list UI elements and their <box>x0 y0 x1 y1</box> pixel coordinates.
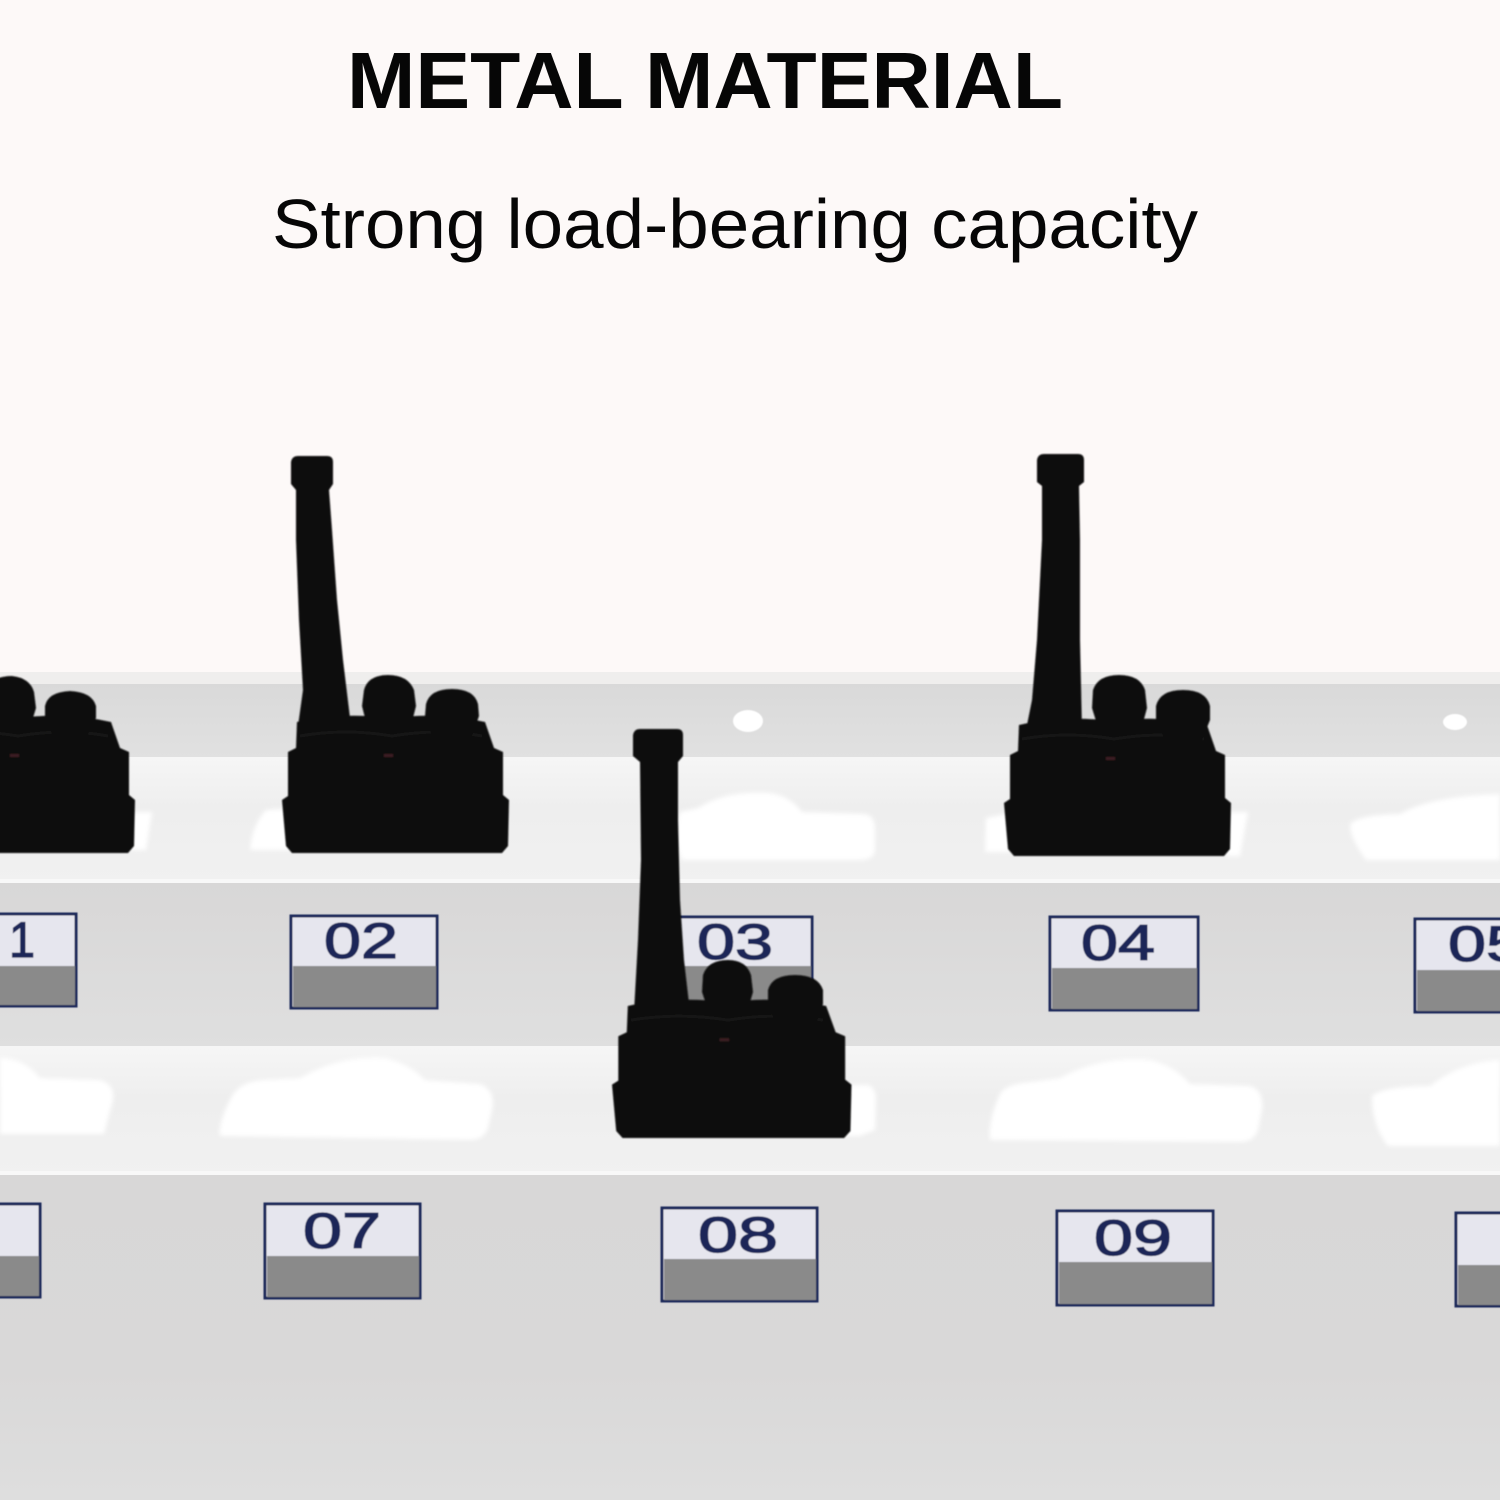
number label 06 <box>0 1204 40 1297</box>
page background <box>0 0 1500 680</box>
number label 01: 1 <box>9 912 35 968</box>
number label 02: 02 <box>324 913 398 969</box>
number label 07 <box>265 1203 420 1298</box>
number label 04 <box>1050 915 1198 1010</box>
number label 04: 04 <box>1081 915 1155 971</box>
number label 03: 03 <box>697 914 773 970</box>
number label 02 <box>291 913 437 1008</box>
radio in slot 04 <box>1004 454 1231 856</box>
radio in slot 08 <box>612 729 851 1138</box>
number label 09 <box>1057 1210 1213 1305</box>
number label 05 <box>1415 916 1500 1012</box>
subtitle: Strong load-bearing capacity <box>272 185 1198 263</box>
number label 03 <box>666 914 812 1010</box>
number label 09: 09 <box>1094 1210 1172 1266</box>
rack: white metal charging shelf <box>0 672 1500 1500</box>
number label 07: 07 <box>303 1203 381 1259</box>
number label 08: 08 <box>698 1207 778 1263</box>
title: METAL MATERIAL <box>347 36 1063 125</box>
radio in slot 02 <box>282 456 509 853</box>
number label 10 <box>1456 1213 1500 1306</box>
mounting holes <box>733 710 1467 732</box>
number label 01 <box>0 912 76 1006</box>
lower row cut-outs <box>0 1058 1500 1146</box>
upper row cut-outs <box>130 793 1500 860</box>
radio in slot 01 <box>0 676 135 853</box>
number label 08 <box>662 1207 817 1301</box>
